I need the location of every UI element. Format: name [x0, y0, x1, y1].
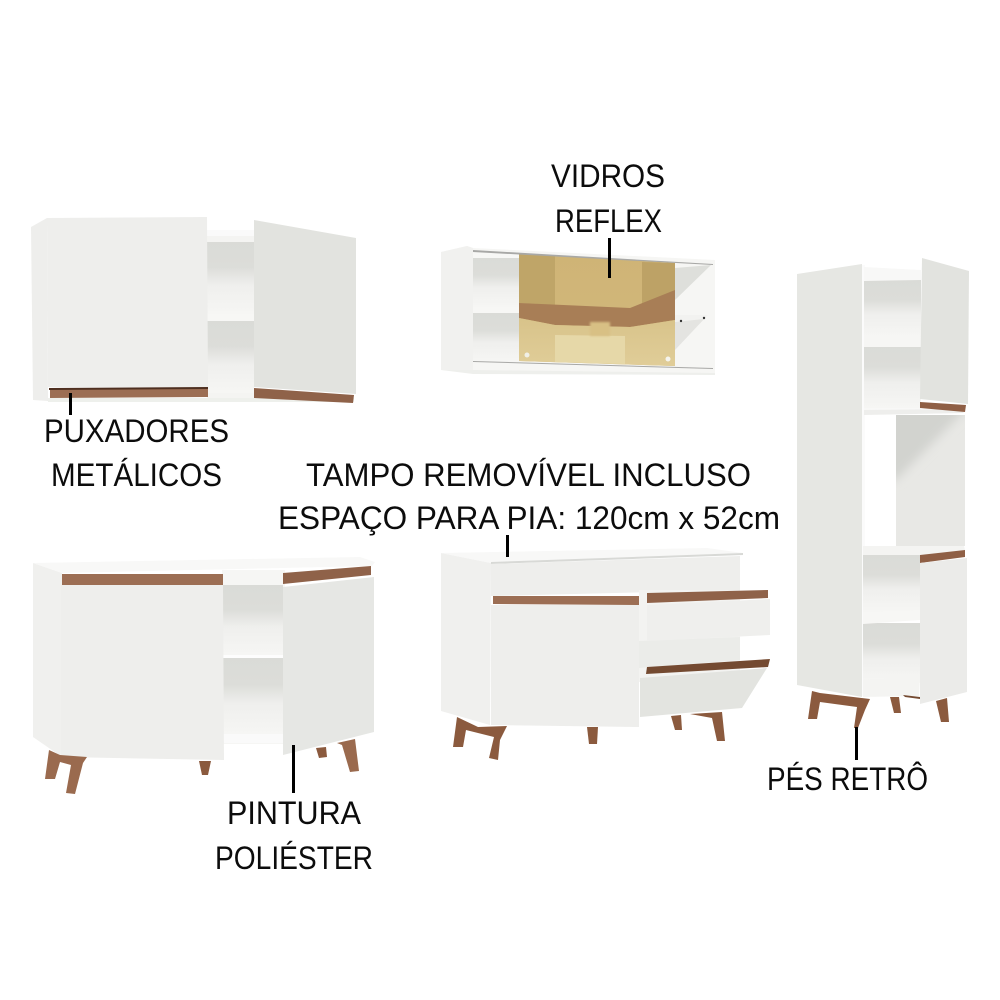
cabinet side	[31, 218, 48, 401]
glass sliding rails	[473, 250, 713, 369]
countertop	[441, 548, 743, 563]
oven opening	[896, 415, 965, 546]
panel: tall oven tower	[797, 258, 975, 728]
panel: wall cabinet with reflex glass	[441, 246, 715, 375]
lower compartment	[863, 546, 965, 697]
label: pés retrô: PÉS RETRÔ	[767, 761, 928, 797]
upper drawer front	[647, 599, 770, 641]
upper drawer handle	[647, 590, 768, 603]
upper door	[920, 258, 969, 404]
panel: upper cabinet with two doors	[31, 217, 356, 403]
label: vidros reflex: REFLEX	[555, 203, 662, 239]
label: puxadores metálicos: PUXADORES	[44, 413, 229, 449]
cabinet side	[441, 553, 491, 725]
tower side	[797, 264, 862, 697]
label: vidros reflex	[551, 158, 665, 278]
open right bay	[675, 263, 712, 367]
cabinet interior	[48, 230, 354, 402]
label: puxadores metálicos	[44, 393, 229, 493]
cabinet interior	[639, 590, 740, 682]
lower drawer handle	[646, 659, 770, 674]
panel: sink cabinet with drawers	[441, 548, 770, 760]
panel: base cabinet with two doors	[33, 557, 375, 794]
retro legs	[808, 691, 949, 728]
label: vidros reflex: VIDROS	[551, 158, 665, 194]
left door metal handle	[493, 596, 639, 605]
retro legs	[45, 739, 359, 794]
right door	[254, 220, 356, 394]
right door metal handle	[283, 566, 371, 584]
fixed top drawer	[491, 556, 740, 596]
cabinet lower edge	[441, 370, 715, 375]
label: tampo removível: ESPAÇO PARA PIA: 120cm x 52cm	[278, 500, 780, 536]
label: pintura poliéster: PINTURA	[227, 795, 362, 831]
countertop	[33, 557, 375, 573]
lower handle	[920, 550, 965, 563]
left door metal handle	[50, 388, 208, 398]
label: tampo removível: TAMPO REMOVÍVEL INCLUSO	[306, 457, 751, 493]
lower door	[920, 558, 967, 704]
lower drawer front	[640, 668, 767, 717]
right door	[283, 577, 374, 755]
left door	[61, 585, 224, 760]
upper door handle	[920, 402, 966, 412]
upper open compartment	[864, 267, 964, 415]
label: tampo removível	[278, 457, 780, 557]
retro legs	[453, 712, 725, 760]
open left bay	[473, 253, 519, 363]
right door metal handle	[254, 388, 354, 403]
cabinet interior	[222, 570, 285, 744]
label: puxadores metálicos: METÁLICOS	[51, 457, 222, 493]
cabinet side	[33, 563, 62, 757]
left door metal handle	[62, 574, 223, 585]
cabinet body	[441, 246, 715, 374]
label: pés retrô	[767, 727, 928, 797]
label: pintura poliéster: POLIÉSTER	[215, 840, 373, 876]
label: pintura poliéster	[215, 745, 373, 876]
left door	[491, 605, 639, 727]
reflex glass panel	[519, 253, 675, 366]
left door	[47, 217, 208, 387]
